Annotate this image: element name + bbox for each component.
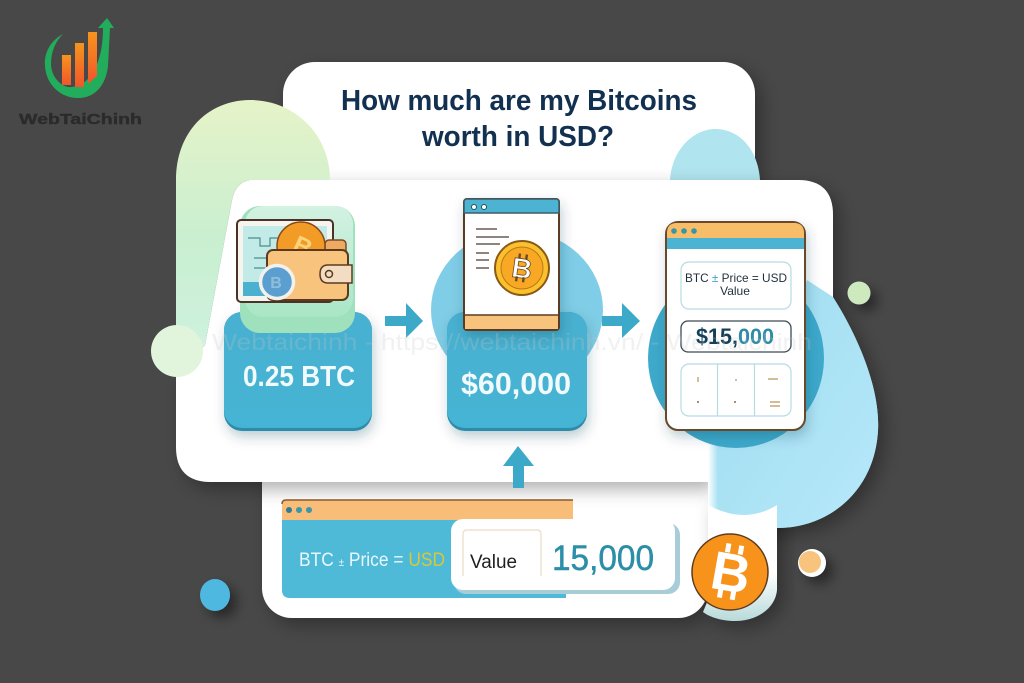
title line 2: worth in USD? <box>421 121 614 153</box>
icon: green tile inner <box>245 206 353 317</box>
icon: browser page <box>464 199 559 330</box>
icon: clasp <box>320 265 352 283</box>
result box <box>681 321 791 352</box>
panel: lower card <box>262 420 708 618</box>
icon: card behind wallet <box>237 220 333 302</box>
icon: coin in wallet <box>277 222 325 270</box>
arrow: up to $60,000 <box>503 446 534 488</box>
dot: blue <box>200 579 230 611</box>
header orange <box>667 223 804 238</box>
dot: green right <box>848 282 870 304</box>
title: How much are my Bitcoins <box>341 85 697 117</box>
calculator body <box>666 222 805 430</box>
blue dome behind main card <box>670 129 760 180</box>
step 2: price: B <box>510 252 534 285</box>
dot: green left <box>151 325 203 377</box>
green blob left <box>176 100 330 375</box>
keypad <box>681 364 791 416</box>
icon: green tile outer <box>240 206 355 333</box>
keypad glyphs <box>698 377 780 406</box>
logo wordmark: WebTaiChinh <box>19 111 142 128</box>
dot: orange <box>798 549 826 577</box>
bar header <box>282 500 573 520</box>
logo: WebTaiChinh <box>19 18 142 128</box>
bar formula text: BTC ± Price = USD <box>299 550 445 571</box>
value box 0.25 BTC <box>224 312 372 431</box>
value box $60,000 <box>447 312 587 431</box>
icon: wallet back flap <box>325 240 346 260</box>
value label: Value <box>470 552 517 573</box>
formula bar <box>282 500 680 598</box>
panel: main card <box>176 180 833 482</box>
step 1: wallet: B <box>270 275 282 292</box>
icon: orange bars <box>62 32 97 87</box>
icon: growth ring with arrow <box>45 18 114 98</box>
blob behind step 3 <box>648 268 824 448</box>
blob behind step 2 <box>431 230 603 390</box>
step 1: wallet <box>224 206 372 431</box>
icon: wallet body <box>267 250 348 300</box>
icon: big bitcoin coin <box>692 534 768 610</box>
fade at panel edge <box>708 440 718 512</box>
value number: 15,000 <box>552 539 654 578</box>
watermark: Webtaichinh - https://webtaichinh.vn/ - Webtaichinh <box>212 329 812 355</box>
value card <box>454 523 680 594</box>
pale strip behind coin <box>703 500 777 621</box>
icon: bitcoin coin <box>495 241 549 295</box>
blue blob upper right <box>708 280 878 528</box>
arrow: step 1 to step 2 <box>385 303 423 338</box>
icon: blue badge <box>260 266 294 298</box>
icon: big bitcoin coin: B <box>706 540 755 606</box>
formula box <box>681 262 791 309</box>
formula text line 2: Value <box>720 284 750 298</box>
step 1: wallet: B <box>288 230 317 263</box>
label 0.25 BTC: 0.25 BTC <box>243 361 355 393</box>
formula text: BTC ± Price = USD <box>685 271 787 285</box>
step 2: price <box>447 199 587 431</box>
header blue <box>667 238 804 249</box>
result text: $15,000 <box>696 324 774 349</box>
bar body <box>282 520 566 598</box>
label $60,000: $60,000 <box>461 366 571 401</box>
value label tab <box>463 530 541 576</box>
text lines <box>476 229 509 268</box>
panel: title card <box>283 62 755 262</box>
blue blob shadow layer <box>708 280 878 528</box>
arrow: step 2 to step 3 <box>602 303 640 338</box>
step 3: calculator <box>666 222 805 430</box>
